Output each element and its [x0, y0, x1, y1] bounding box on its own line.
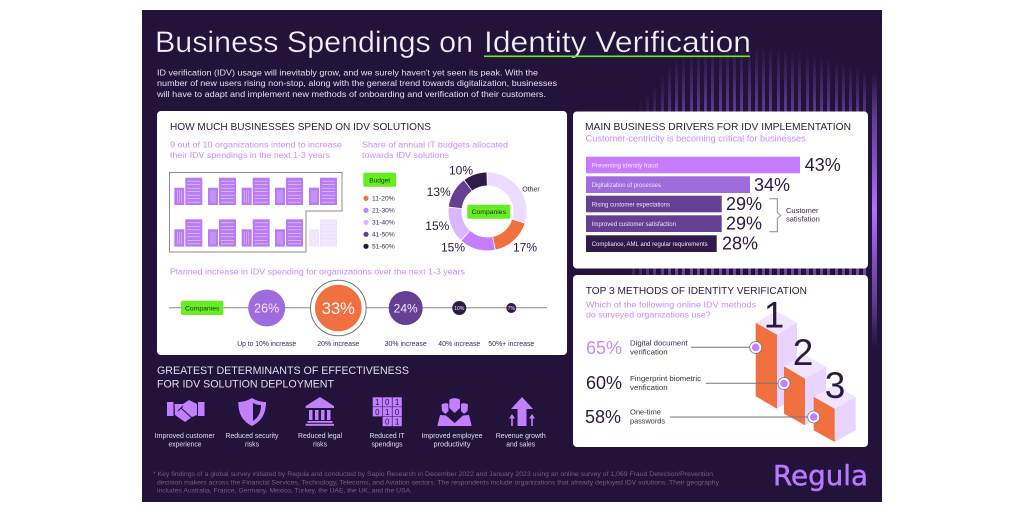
determinant labels: Revenue growth [496, 433, 546, 440]
panel: main business drivers [573, 112, 868, 268]
bubble timeline: 24% [394, 302, 418, 316]
method 2: verification [630, 383, 668, 392]
text: 9 out of 10 organizations [170, 140, 342, 160]
panel heading: HOW MUCH BUSINESSES SPEND ON IDV SOLUTIONS [170, 122, 431, 133]
badge: budget: Budget [369, 177, 390, 184]
icon: binary code: 1 [375, 398, 380, 407]
bubble timeline: 7% [508, 306, 515, 312]
bubble timeline: 20% increase [317, 341, 359, 348]
icon: shield [238, 398, 266, 426]
pictogram: 9 of 10 buildings [170, 172, 342, 252]
determinant labels: productivity [434, 442, 471, 448]
heading: greatest determinants: GREATEST DETERMINANTS OF EFFECTIVENESS [157, 365, 409, 377]
determinant labels: spendings [372, 442, 403, 448]
panel heading: MAIN BUSINESS DRIVERS FOR IDV IMPLEMENTATION [585, 122, 851, 133]
heading: greatest determinants: FOR IDV SOLUTION DEPLOYMENT [157, 378, 334, 390]
icon: binary code: 0 [375, 408, 380, 417]
bar chart: Improved customer satisfaction [592, 221, 676, 228]
determinant labels: Reduced security [226, 433, 279, 440]
icon: binary code: 1 [395, 418, 400, 427]
icon: binary code: 0 [395, 408, 400, 417]
determinant labels: risks [313, 442, 327, 448]
method 3: 58% [585, 407, 621, 427]
bar chart: 34% [754, 175, 790, 195]
method 1: Digital document [630, 338, 689, 348]
bracket: customer satisfaction: satisfation [786, 215, 820, 224]
bar chart: Compliance, AML and regular requirements [592, 241, 708, 248]
intro text [156, 68, 558, 99]
donut chart [425, 164, 540, 254]
determinant labels: experience [168, 442, 202, 448]
method 2: 60% [586, 373, 622, 393]
bubble timeline: 26% [254, 302, 279, 316]
icon: handshake [167, 400, 204, 422]
icon: bank [306, 397, 334, 426]
isometric column 2: 2 [793, 332, 813, 373]
icon: employees [437, 398, 472, 426]
bar chart [586, 155, 841, 254]
method 3: One-time [630, 408, 661, 416]
decorative stripes [632, 45, 877, 375]
donut chart: Other [522, 186, 540, 193]
method 3 [585, 407, 820, 427]
method 1: verification [630, 348, 668, 356]
panel subtitle: do surveyed organizations use? [586, 310, 711, 320]
determinant labels [155, 433, 546, 448]
legend: budget ranges: 31-40% [372, 220, 395, 227]
legend: budget ranges: 21-30% [372, 208, 395, 215]
donut chart: 13% [427, 185, 451, 199]
title [155, 26, 751, 59]
dark background panel [142, 10, 882, 502]
panel subtitle: Customer-centricity is becoming critical for businesses [586, 134, 806, 144]
panel: top 3 methods [573, 275, 868, 447]
panel subtitle [586, 300, 756, 320]
method 2: Fingerprint biometric [630, 374, 701, 383]
determinant labels: risks [245, 442, 259, 448]
panel heading: TOP 3 METHODS OF IDENTITY VERIFICATION [586, 286, 807, 297]
determinant labels: Reduced IT [370, 433, 405, 440]
icon: revenue arrows [509, 397, 535, 426]
method 1: 65% [586, 338, 622, 358]
bubble timeline: Up to 10% increase [237, 341, 296, 348]
bar chart: Digitalization of processes [592, 182, 662, 189]
donut chart: 17% [513, 240, 537, 254]
icon: binary code: 1 [395, 398, 400, 407]
legend: budget ranges: 51-60% [372, 244, 395, 251]
icon: binary code: 1 [385, 408, 390, 417]
heading: greatest determinants [157, 365, 409, 390]
text: 9 out of 10 organizations: 9 out of 10 organizations intend to increase [170, 140, 342, 150]
panel subtitle: Which of the following online IDV methods [586, 300, 756, 310]
footnote [153, 471, 720, 495]
footnote: decision makers across the Financial Services, Technology, Telecoms, and Aviation sectors. The respondents include organizations that already deployed IDV solutions. Their geography [157, 479, 720, 486]
isometric column 1 [756, 294, 797, 409]
donut chart: 15% [441, 240, 465, 254]
text: 9 out of 10 organizations: their IDV spendings in the next 1-3 years [170, 150, 330, 160]
determinant labels: and sales [506, 442, 536, 448]
determinant labels: Reduced legal [298, 433, 342, 440]
intro text: number of new users rising non-stop, along with the general trend towards digitalization, businesses [157, 78, 558, 88]
isometric column 2 [784, 332, 826, 425]
text: share of annual budgets [362, 140, 508, 160]
method 1 [586, 338, 762, 358]
legend: budget ranges: 41-50% [372, 232, 395, 239]
logo: Regula: Regula [773, 459, 868, 492]
donut chart: 10% [449, 164, 473, 178]
method 3: passwords [630, 416, 665, 426]
determinant labels: Improved customer [155, 433, 215, 440]
bubble timeline: 33% [322, 300, 355, 318]
donut chart: Companies [472, 209, 507, 216]
legend: budget ranges: 11-20% [372, 196, 395, 203]
determinant labels: Improved employee [422, 433, 483, 440]
isometric column 3 [814, 365, 856, 442]
icon: binary code: 0 [385, 398, 390, 407]
bubble timeline: 10% [454, 306, 465, 312]
bar chart: 29% [726, 214, 762, 234]
donut chart: 15% [425, 219, 450, 233]
intro text: ID verification (IDV) usage will inevitably grow, and we surely haven't yet seen its peak. With the [157, 68, 538, 78]
icon: binary code [373, 397, 402, 427]
bubble timeline: Companies [185, 305, 220, 312]
bar chart: Preventing identity fraud [592, 162, 658, 169]
bubble timeline: 40% increase [438, 341, 480, 348]
text: planned increase: Planned increase in IDV spending for organizations over the next 1-3 years [170, 266, 465, 276]
isometric column 1: 1 [764, 294, 784, 336]
badge: budget [363, 173, 396, 187]
bar chart: Rising customer expectations [592, 201, 671, 208]
bar chart: 28% [722, 234, 758, 254]
text: share of annual budgets: towards IDV solutions [362, 150, 449, 160]
method 2 [586, 373, 790, 393]
isometric column 3: 3 [825, 365, 845, 406]
bar chart: 29% [726, 194, 762, 214]
intro text: will have to adapt and implement new methods of onboarding and verification of their customers. [156, 89, 546, 99]
text: share of annual budgets: Share of annual IT budgets allocated [362, 140, 508, 150]
bar chart: 43% [805, 155, 841, 175]
legend: budget ranges [363, 196, 395, 251]
title: Business Spendings on [155, 26, 473, 59]
bubble timeline [169, 280, 547, 348]
bubble timeline: 30% increase [385, 341, 427, 348]
footnote: includes Australia, France, Germany, Mexico, Turkey, the UAE, the UK, and the USA. [157, 488, 412, 495]
bracket: customer satisfaction: Customer [786, 206, 819, 215]
bubble timeline: 50%+ increase [488, 341, 534, 348]
icon: binary code: 0 [385, 418, 390, 427]
bracket: customer satisfaction [769, 199, 820, 232]
title: Identity Verification [484, 26, 751, 59]
panel: how much businesses spend [157, 111, 567, 355]
footnote: * Key findings of a global survey initiated by Regula and conducted by Sapio Research in December 2022 and January 2023 using an online survey of 1,069 Fraud Detection/Prevention [153, 471, 713, 478]
